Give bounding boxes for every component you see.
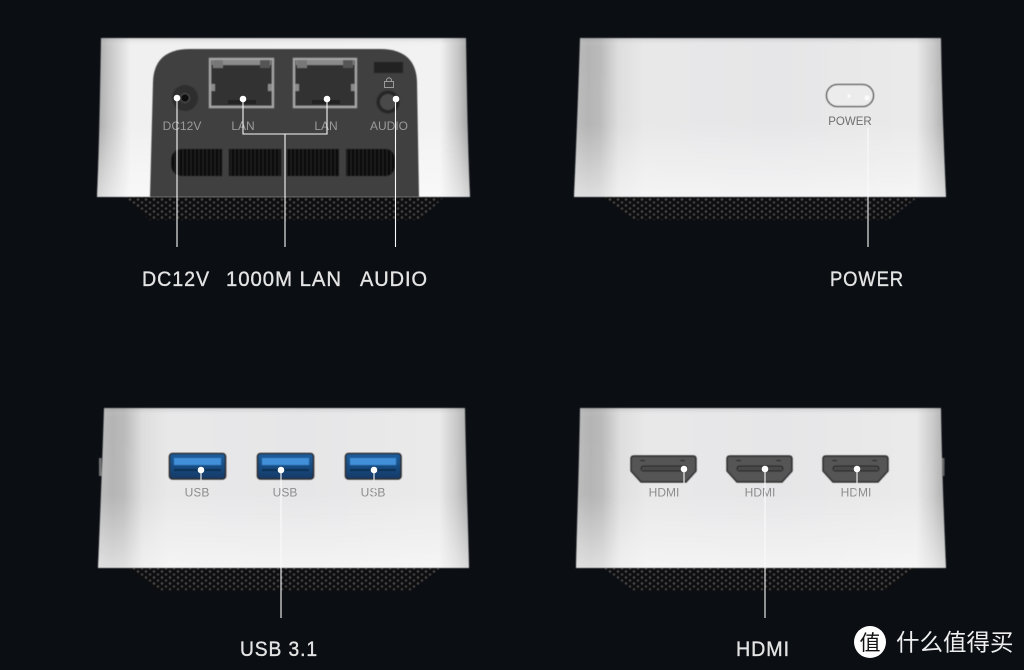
port labels: HDMI: HDMI bbox=[841, 486, 871, 500]
port labels: LAN bbox=[231, 119, 255, 133]
device body bbox=[576, 408, 946, 568]
icon: card slot bbox=[374, 62, 403, 73]
device body bbox=[98, 408, 469, 568]
icon: HDMI port 3 bbox=[823, 456, 888, 482]
caption: power: POWER bbox=[830, 268, 904, 291]
panel: HDMI device bbox=[576, 408, 946, 661]
watermark bbox=[854, 624, 1014, 658]
port labels: USB: USB bbox=[361, 486, 385, 500]
port labels: USB: USB bbox=[185, 486, 209, 500]
icon: HDMI port 2 bbox=[727, 456, 792, 482]
callout lines: rear ports bbox=[174, 95, 399, 247]
callout lines: HDMI bbox=[681, 466, 860, 618]
icon: lock bbox=[384, 78, 394, 88]
panel: power device bbox=[574, 38, 946, 291]
captions: rear ports bbox=[142, 268, 428, 291]
caption: USB: USB 3.1 bbox=[240, 638, 318, 661]
panel: USB device bbox=[98, 408, 469, 661]
device base grille bbox=[603, 568, 917, 590]
panel: rear ports device bbox=[97, 38, 470, 291]
icon: watermark badge bbox=[854, 626, 886, 658]
port labels: HDMI bbox=[649, 486, 871, 500]
callout line: power bbox=[867, 128, 869, 247]
device base grille bbox=[602, 197, 918, 220]
icon: DC12V jack bbox=[172, 85, 198, 111]
device body bbox=[97, 38, 470, 197]
port labels: HDMI: HDMI bbox=[745, 486, 775, 500]
port labels: USB: USB bbox=[273, 486, 297, 500]
port labels: LAN bbox=[314, 119, 338, 133]
port labels: AUDIO bbox=[370, 119, 408, 133]
port labels: USB bbox=[185, 486, 385, 500]
caption: HDMI: HDMI bbox=[736, 638, 790, 661]
device base grille bbox=[127, 568, 442, 590]
dark port panel bbox=[150, 49, 419, 197]
icon: LAN port 2 bbox=[294, 59, 356, 107]
callout lines: USB bbox=[198, 467, 377, 618]
captions: rear ports: 1000M LAN bbox=[226, 268, 342, 291]
vent slots bbox=[171, 149, 395, 176]
device body bbox=[574, 38, 946, 197]
icon: power button bbox=[826, 84, 874, 106]
icon: LAN port 1 bbox=[210, 59, 273, 107]
watermark text: 什么值得买 bbox=[896, 624, 1014, 658]
port label: power: POWER bbox=[828, 116, 872, 128]
captions: rear ports: AUDIO bbox=[360, 268, 428, 291]
captions: rear ports: DC12V bbox=[142, 268, 210, 291]
device base grille bbox=[124, 197, 444, 220]
port labels: DC12V bbox=[163, 119, 201, 133]
icon: watermark badge: 值 bbox=[860, 627, 880, 657]
port labels bbox=[163, 119, 408, 133]
icon: USB port 2 bbox=[258, 454, 314, 479]
port labels: HDMI: HDMI bbox=[649, 486, 679, 500]
icon: USB port 1 bbox=[170, 454, 226, 479]
icon: HDMI port 1 bbox=[631, 456, 696, 482]
icon: audio jack bbox=[376, 90, 400, 114]
icon: USB port 3 bbox=[346, 454, 401, 479]
